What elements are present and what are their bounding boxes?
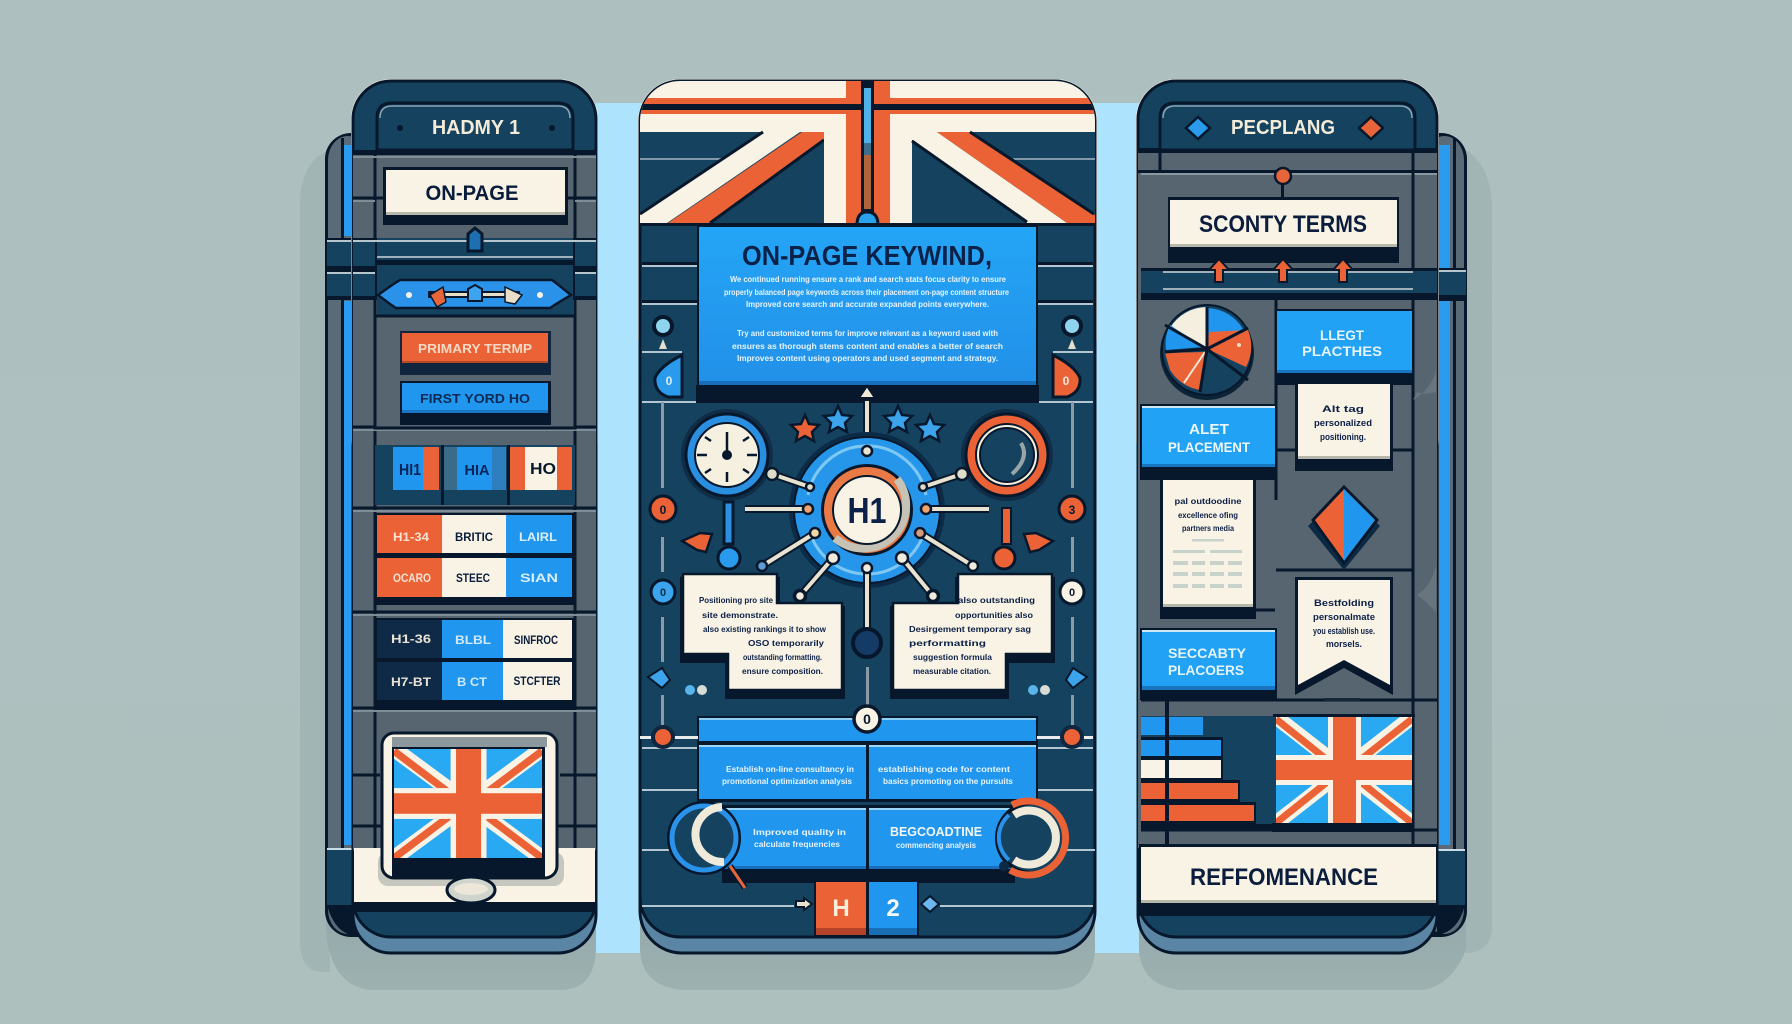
bar chart bbox=[1141, 700, 1276, 848]
button: primary term bbox=[400, 331, 551, 375]
heading: on-page keywind: ON-PAGE KEYWIND, bbox=[742, 240, 992, 271]
flag header bbox=[640, 81, 1095, 226]
heading tiles: H and 2: 2 bbox=[886, 895, 900, 922]
central H1 hub bbox=[789, 432, 945, 588]
table: tag rows lower: SINFROC bbox=[514, 633, 558, 647]
blue info grid: commencing analysis bbox=[896, 840, 976, 850]
icon: right lens bbox=[997, 801, 1067, 875]
slider ribbon bbox=[378, 280, 571, 308]
button: first word: FIRST YORD HO bbox=[420, 391, 530, 406]
label: alt placement: ALET bbox=[1189, 421, 1229, 438]
blue info grid: calculate frequencies bbox=[754, 839, 840, 849]
table: tag rows lower bbox=[375, 618, 575, 710]
arrow: up from hub bbox=[859, 386, 875, 450]
panel: right column bbox=[1136, 79, 1467, 953]
flag on tablet bbox=[394, 749, 542, 858]
badge: 0 bbox=[863, 711, 871, 727]
callout: right: Desirgement temporary sag bbox=[909, 624, 1031, 634]
heading tabs: HO bbox=[530, 461, 556, 478]
grid sub heading: BEGCOADTINE bbox=[890, 824, 982, 839]
hub label: H1 bbox=[848, 490, 886, 531]
callout: left bbox=[683, 574, 842, 696]
table: tag rows upper bbox=[375, 513, 575, 605]
callout: left: also existing rankings it to show bbox=[703, 624, 826, 634]
home button bbox=[447, 877, 495, 903]
secondary terms label bbox=[1168, 197, 1399, 263]
blue info grid: Improved quality in bbox=[753, 827, 846, 837]
blue info grid: Establish on-line consultancy in bbox=[726, 764, 854, 774]
label: top right blue: PLACTHES bbox=[1302, 343, 1382, 359]
side stripes bbox=[642, 262, 1095, 907]
badge bbox=[854, 706, 880, 732]
heading tiles: H and 2 bbox=[814, 880, 919, 937]
panel: centre column bbox=[638, 79, 1097, 953]
blue info grid: establishing code for content bbox=[878, 764, 1010, 774]
icon: magnifier bbox=[961, 409, 1053, 569]
footer label: performance: REFFOMENANCE bbox=[1190, 864, 1378, 891]
callout: right: opportunities also bbox=[955, 610, 1033, 620]
body copy: Improved core search and accurate expanded points everywhere. bbox=[746, 299, 989, 309]
heading: pecplang: PECPLANG bbox=[1231, 117, 1335, 139]
note card: table: partners media bbox=[1182, 523, 1234, 533]
callout anchors bbox=[794, 590, 938, 657]
table: tag rows lower: BLBL bbox=[455, 633, 491, 647]
callout: left: OSO temporarily bbox=[748, 638, 824, 648]
body copy bbox=[724, 274, 1009, 363]
side markers bbox=[648, 496, 1087, 695]
heading tiles: H and 2: H bbox=[832, 895, 850, 922]
label: alt placement bbox=[1140, 404, 1277, 480]
on-page label: ON-PAGE bbox=[426, 182, 518, 205]
pie chart bbox=[1160, 305, 1254, 400]
callout: right: also outstanding bbox=[958, 595, 1035, 605]
footer label: performance bbox=[1139, 844, 1438, 916]
label: top right blue: LLEGT bbox=[1320, 327, 1364, 343]
callout: right: measurable citation. bbox=[913, 666, 991, 676]
ribbon card bbox=[1295, 577, 1393, 701]
flag bbox=[1272, 714, 1415, 832]
secondary terms label: SCONTY TERMS bbox=[1199, 211, 1367, 238]
label: security placement: SECCABTY bbox=[1168, 645, 1247, 661]
callout: right bbox=[893, 574, 1052, 696]
side markers: 0 bbox=[1069, 587, 1075, 599]
icon: left lens bbox=[669, 803, 745, 888]
heading: hadmy 1: HADMY 1 bbox=[432, 117, 520, 139]
main text box bbox=[696, 225, 1039, 403]
arrows beside tiles bbox=[796, 896, 939, 912]
table: tag rows upper: OCARO bbox=[393, 571, 431, 585]
left side rail bbox=[325, 133, 385, 937]
blue info grid: basics promoting on the pursuits bbox=[883, 776, 1013, 786]
heading tabs bbox=[375, 445, 575, 505]
blue info grid: promotional optimization analysis bbox=[722, 776, 852, 786]
heading tabs: HIA bbox=[464, 462, 490, 479]
table: tag rows upper: BRITIC bbox=[455, 530, 493, 544]
icons: side bulbs and teardrops: 0 bbox=[1063, 374, 1070, 388]
table: tag rows lower: H1-36 bbox=[391, 632, 431, 646]
side orange nodes bbox=[640, 727, 1093, 747]
heading tabs: HI1 bbox=[399, 462, 421, 479]
note card: alt tag: Alt tag bbox=[1322, 404, 1364, 414]
body copy: ensures as thorough stems content and enables a better of search bbox=[732, 341, 1003, 351]
body copy: Improves content using operators and used segment and strategy. bbox=[737, 353, 998, 363]
connector nodes bbox=[757, 446, 978, 573]
icon: diamond bbox=[1308, 487, 1380, 570]
callout: right: suggestion formula bbox=[913, 652, 992, 662]
label: alt placement: PLACEMENT bbox=[1168, 439, 1250, 455]
button: first word bbox=[400, 381, 551, 425]
tablet with flag bbox=[378, 733, 564, 903]
icon: blue diamond bbox=[1186, 117, 1210, 139]
body bbox=[353, 155, 596, 850]
icons: side bulbs and teardrops bbox=[654, 317, 1081, 397]
body copy: We continued running ensure a rank and search stats focus clarity to ensure bbox=[730, 274, 1006, 284]
note card: table: pal outdoodine bbox=[1174, 496, 1242, 506]
table: tag rows lower: B CT bbox=[457, 675, 488, 689]
callout: left: outstanding formatting. bbox=[743, 652, 822, 662]
side markers: 0 bbox=[660, 587, 666, 599]
on-page label bbox=[383, 167, 568, 225]
icon: pin connector bbox=[468, 228, 482, 251]
icons: stars bbox=[791, 406, 944, 441]
note card: alt tag bbox=[1295, 381, 1393, 471]
arrows: up bbox=[1209, 259, 1353, 282]
ribbon card: morsels. bbox=[1326, 639, 1362, 649]
ribbon card: Bestfolding bbox=[1314, 598, 1374, 608]
table: tag rows upper: STEEC bbox=[456, 571, 490, 585]
note card: table: excellence ofing bbox=[1178, 510, 1238, 520]
ribbon card: you establish use. bbox=[1313, 626, 1375, 636]
note card: alt tag: positioning. bbox=[1320, 432, 1366, 442]
ribbon card: personalmate bbox=[1313, 612, 1375, 622]
table: tag rows upper: H1-34 bbox=[393, 530, 429, 544]
label: security placement bbox=[1140, 628, 1277, 700]
callout: left: site demonstrate. bbox=[702, 610, 778, 620]
icon: clock bbox=[681, 409, 773, 569]
grey body bbox=[1138, 153, 1437, 848]
table: tag rows upper: SIAN bbox=[520, 571, 558, 585]
table: tag rows lower: H7-BT bbox=[391, 675, 432, 689]
table: tag rows upper: LAIRL bbox=[519, 530, 557, 544]
header plate bbox=[1160, 103, 1415, 150]
note card: table bbox=[1160, 477, 1256, 619]
hub connectors bbox=[745, 474, 989, 643]
callout: right: performatting bbox=[909, 638, 986, 648]
table: tag rows lower: STCFTER bbox=[514, 674, 561, 688]
body copy: Try and customized terms for improve relevant as a keyword used with bbox=[737, 328, 998, 338]
callout: left: Positioning pro site bbox=[699, 595, 773, 605]
callout: left: ensure composition. bbox=[742, 666, 823, 676]
header plate bbox=[377, 103, 573, 150]
note card: alt tag: personalized bbox=[1314, 418, 1372, 428]
right side rail bbox=[1405, 133, 1467, 937]
button: primary term: PRIMARY TERMP bbox=[418, 341, 532, 356]
label: security placement: PLACOERS bbox=[1168, 662, 1244, 678]
panel: left column bbox=[325, 79, 598, 953]
blue info grid bbox=[697, 706, 1038, 883]
icon: orange diamond bbox=[1359, 117, 1383, 139]
body copy: properly balanced page keywords across their placement on-page content structure bbox=[724, 287, 1009, 297]
side markers: 3 bbox=[1069, 503, 1076, 517]
pin bbox=[1275, 168, 1291, 200]
label: top right blue bbox=[1275, 309, 1414, 385]
footer strip bbox=[354, 848, 595, 912]
side markers: 0 bbox=[660, 503, 667, 517]
icons: side bulbs and teardrops: 0 bbox=[666, 374, 673, 388]
background: light blue band and soft panel shadows bbox=[300, 103, 1492, 990]
